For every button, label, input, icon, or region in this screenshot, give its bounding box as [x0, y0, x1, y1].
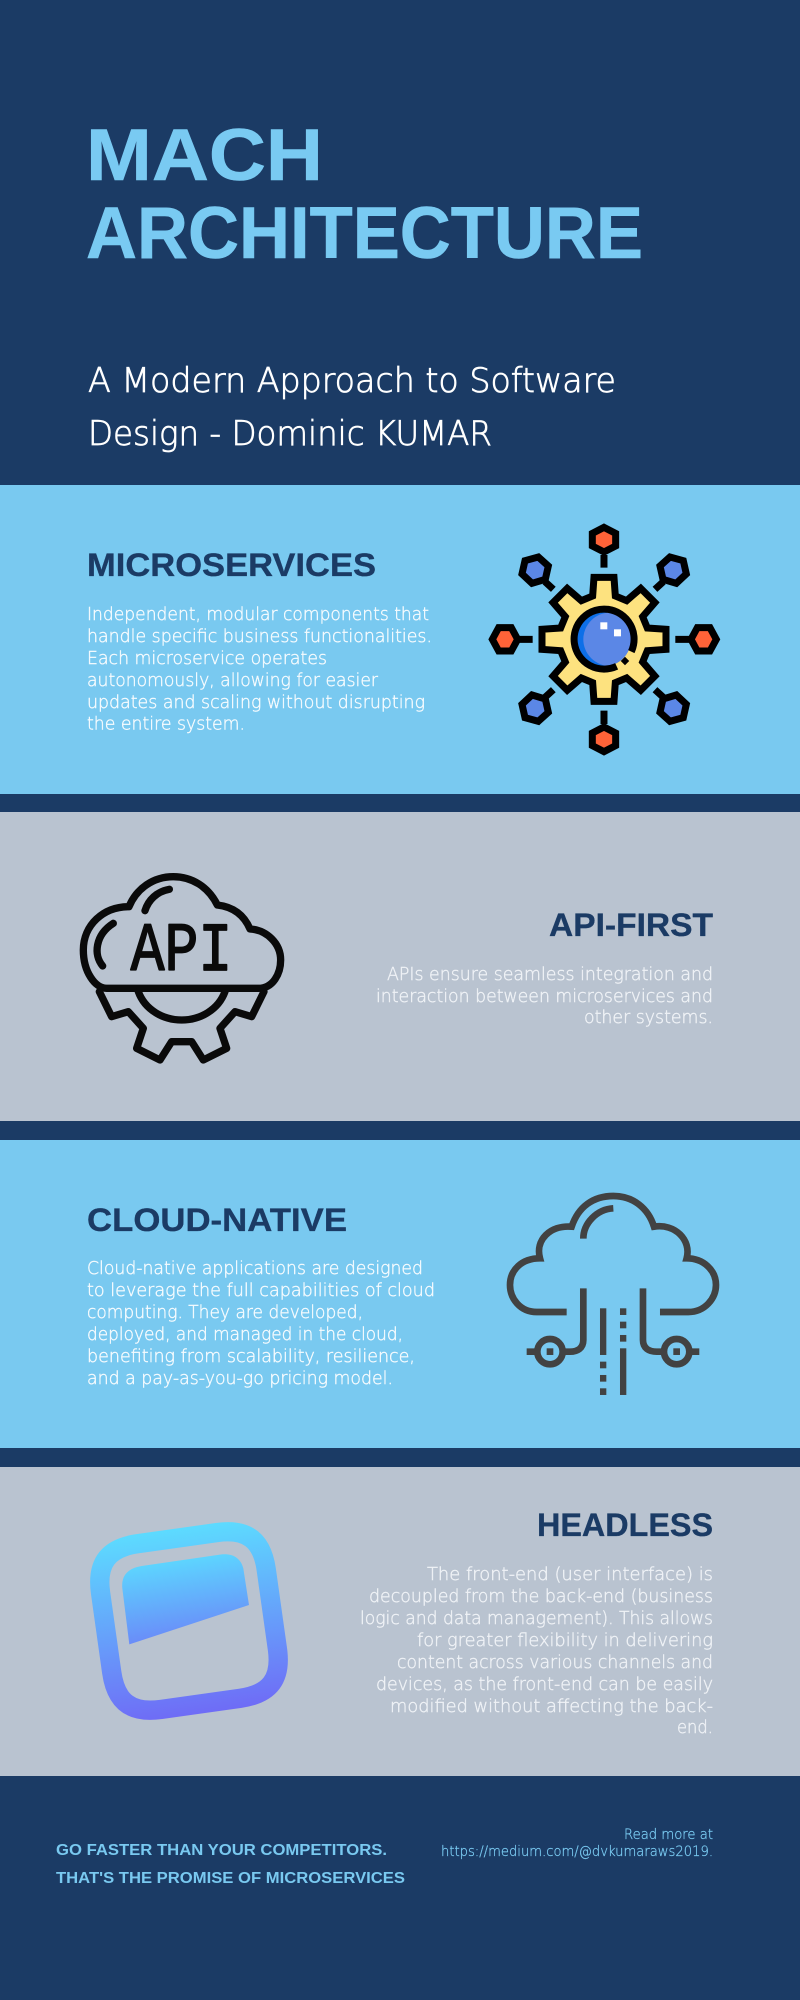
text: microservices description: updates and scaling without disrupting [87, 692, 425, 713]
heading: headless: HEADLESS [537, 1507, 713, 1543]
text: api-first description [376, 964, 713, 1028]
panel: api-first [0, 812, 800, 1121]
text: headless description: The front-end (user interface) is [427, 1564, 713, 1585]
icon: microservices gear with hexagon nodes [492, 527, 716, 752]
text: microservices description: Each microservice operates [87, 648, 327, 669]
text: headless description: for greater flexibility in delivering [417, 1630, 713, 1651]
panel: headless [0, 1467, 800, 1776]
text: api-first description: interaction between microservices and [376, 986, 713, 1007]
text: headless description [360, 1564, 713, 1738]
heading: api-first: API-FIRST [549, 907, 713, 943]
text: microservices description: Independent, modular components that [87, 604, 429, 625]
text: api-first description: other systems. [584, 1007, 713, 1028]
text: cloud-native description: deployed, and managed in the cloud, [87, 1324, 403, 1345]
header: title: MACH [86, 115, 323, 196]
footer: tagline [56, 1842, 405, 1887]
text: microservices description: handle specific business functionalities. [87, 626, 432, 647]
footer: read more link: Read more at [624, 1827, 713, 1843]
text: headless description: logic and data management). This allows [360, 1608, 713, 1629]
text: microservices description: autonomously, allowing for easier [87, 670, 379, 691]
heading: cloud-native: CLOUD-NATIVE [87, 1202, 347, 1238]
text: microservices description: the entire system. [87, 714, 245, 734]
header: subtitle: Design - Dominic KUMAR [88, 414, 492, 454]
header: subtitle [88, 361, 616, 454]
footer: tagline: GO FASTER THAN YOUR COMPETITORS. [56, 1842, 387, 1859]
footer: read more link [441, 1827, 713, 1860]
panel: microservices [0, 485, 800, 794]
text: headless description: end. [677, 1717, 713, 1738]
footer: tagline: THAT'S THE PROMISE OF MICROSERVICES [56, 1870, 405, 1887]
text: cloud-native description: and a pay-as-you-go pricing model. [87, 1368, 393, 1389]
icon: headless rounded square [95, 1527, 283, 1715]
text: cloud-native description: Cloud-native applications are designed [87, 1258, 423, 1279]
header: title [86, 115, 643, 274]
text: cloud-native description [87, 1258, 435, 1389]
text: headless description: devices, as the front-end can be easily [376, 1674, 713, 1695]
text: headless description: content across various channels and [397, 1652, 713, 1673]
text: cloud-native description: benefiting from scalability, resilience, [87, 1346, 415, 1367]
text: microservices description [87, 604, 432, 734]
gear body [542, 577, 666, 701]
footer: read more link: https://medium.com/@dvkumaraws2019. [441, 1844, 713, 1860]
panel: cloud-native [0, 1140, 800, 1448]
icon: api cloud with gear [83, 877, 281, 1060]
text: cloud-native description: computing. They are developed, [87, 1302, 363, 1323]
text: cloud-native description: to leverage the full capabilities of cloud [87, 1280, 435, 1301]
header: subtitle: A Modern Approach to Software [88, 361, 616, 401]
heading: microservices: MICROSERVICES [87, 547, 376, 583]
text: headless description: decoupled from the back-end (business [369, 1586, 713, 1607]
header: title: ARCHITECTURE [86, 193, 643, 274]
text: api-first description: APIs ensure seamless integration and [387, 964, 713, 985]
icon: cloud with circuit lines [510, 1196, 716, 1395]
icon: api cloud with gear: API [131, 913, 232, 991]
text: headless description: modified without affecting the back- [390, 1696, 713, 1717]
